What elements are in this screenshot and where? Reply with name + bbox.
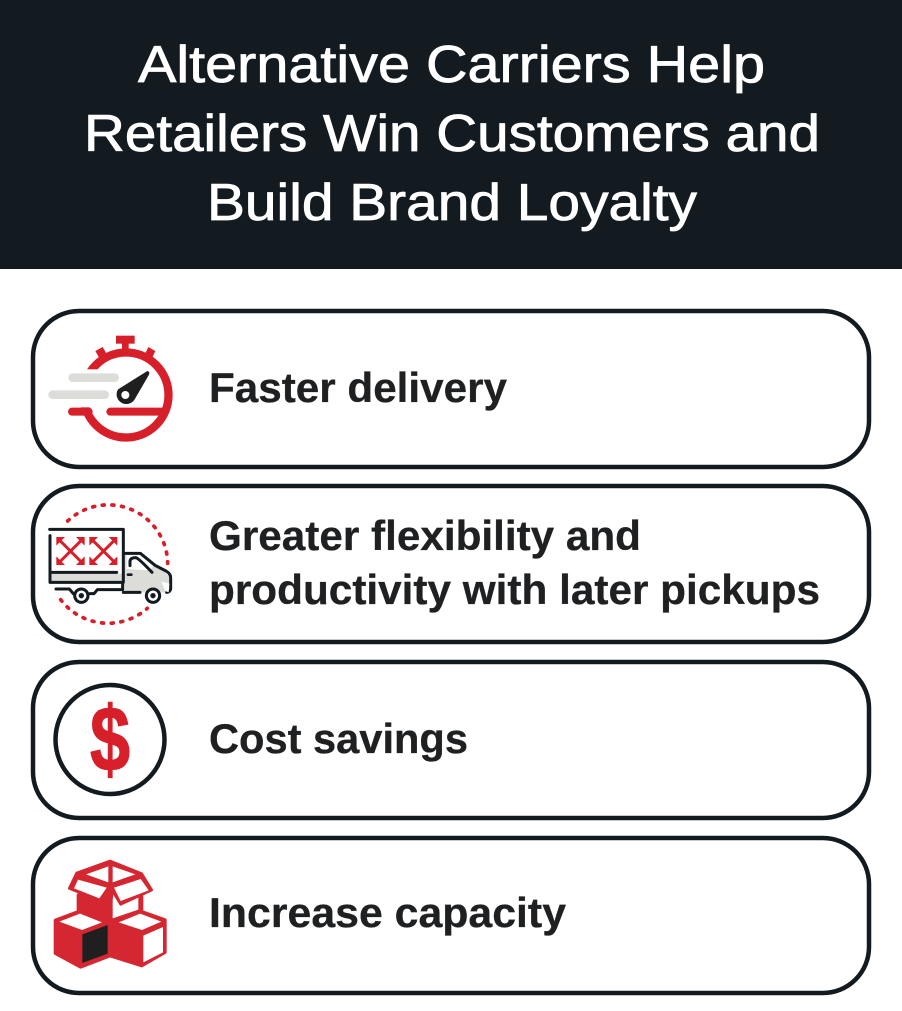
panel: increase capacity xyxy=(33,838,869,993)
label: Greater flexibility and xyxy=(209,512,641,559)
title: Alternative Carriers Help xyxy=(138,36,765,94)
icon: dollar coin xyxy=(56,685,164,794)
icon: stopwatch xyxy=(53,336,168,437)
icon: dollar coin: $ xyxy=(90,689,130,790)
label: Increase capacity xyxy=(209,889,567,936)
wheels xyxy=(75,589,88,602)
gauge needle xyxy=(117,371,149,404)
title xyxy=(84,36,820,232)
icon: delivery truck xyxy=(50,505,171,623)
panel: cost savings xyxy=(33,662,869,818)
title: Retailers Win Customers and xyxy=(84,105,820,163)
expand arrows xyxy=(56,537,117,565)
label: Faster delivery xyxy=(209,364,508,411)
icon: boxes xyxy=(55,861,165,967)
panel: faster delivery xyxy=(33,311,869,467)
label: Cost savings xyxy=(209,715,468,762)
panel: flexibility and productivity: productivity with later pickups xyxy=(209,566,820,613)
title: Build Brand Loyalty xyxy=(207,174,697,232)
header banner xyxy=(0,0,902,269)
panel: flexibility and productivity xyxy=(33,486,869,642)
